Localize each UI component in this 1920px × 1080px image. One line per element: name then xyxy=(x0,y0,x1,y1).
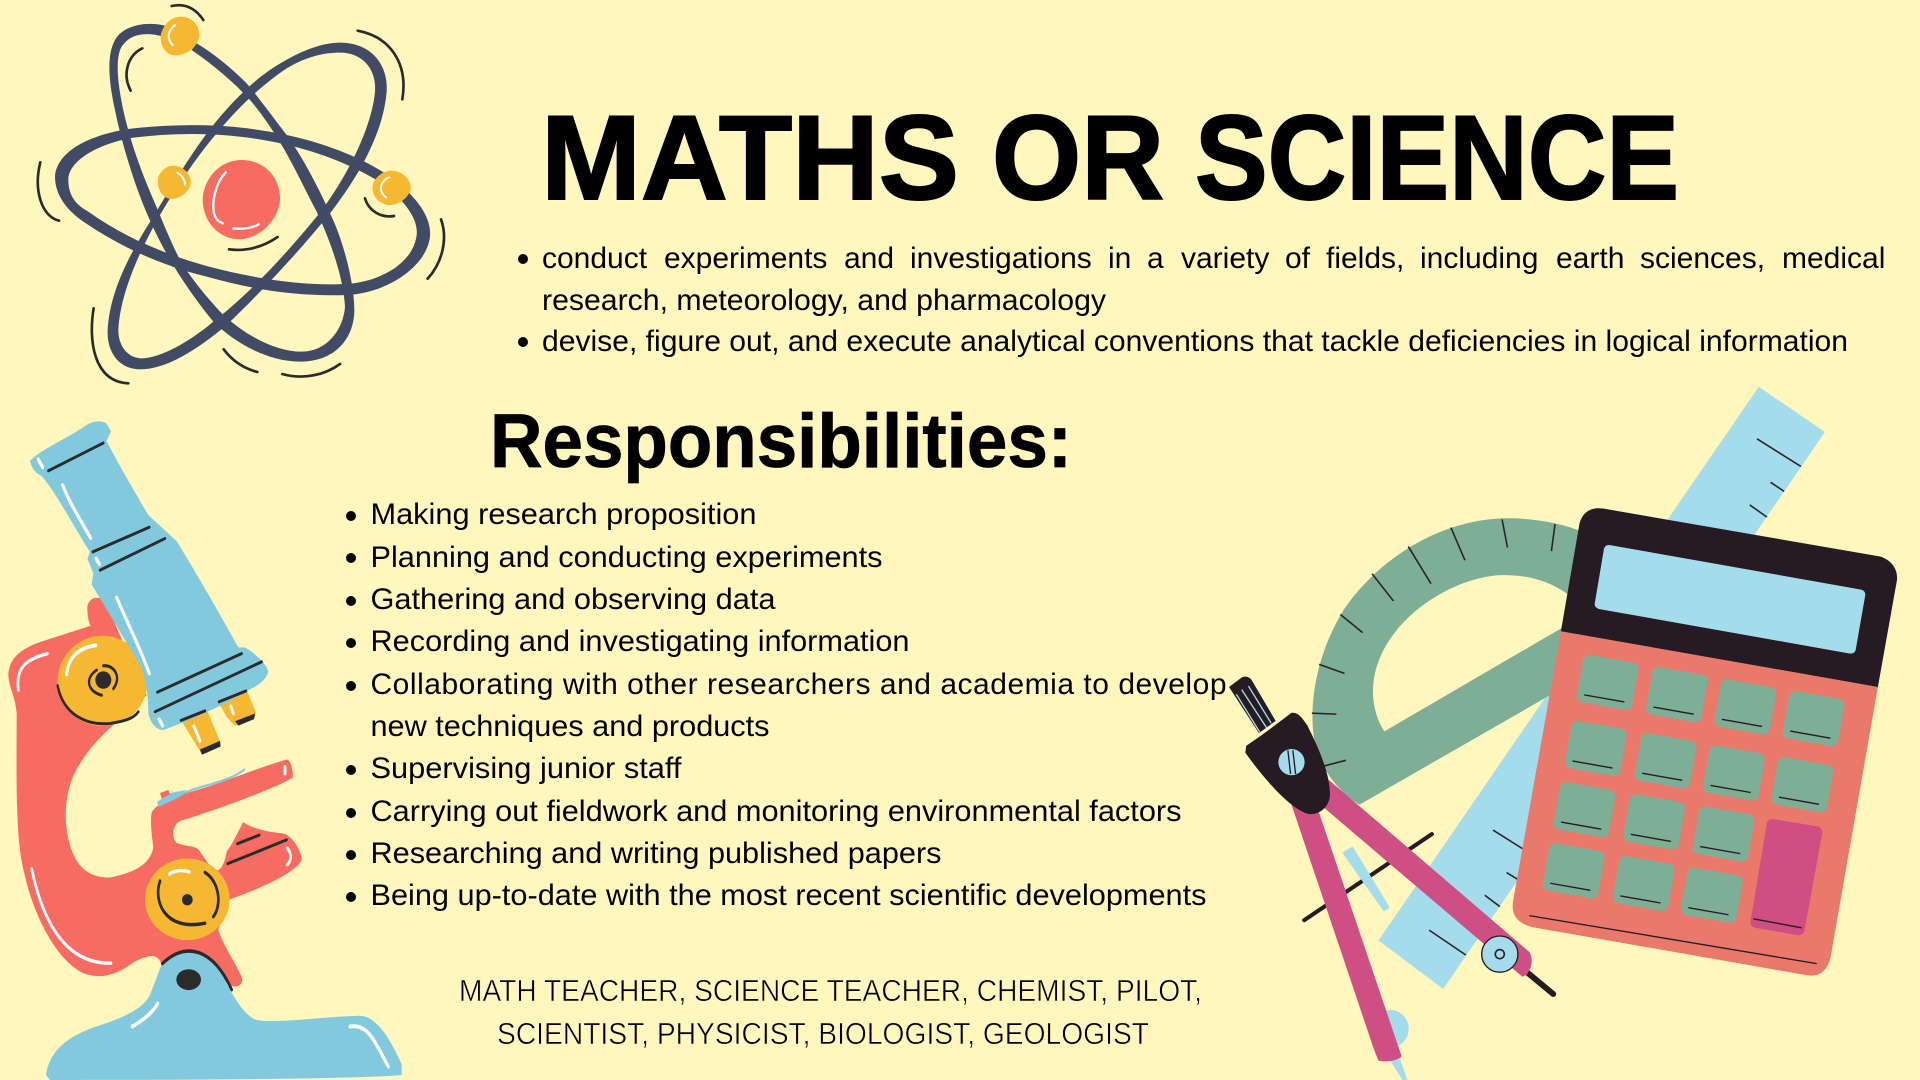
third line: devise, figure out, and execute analytical conventions that tackle deficiencies in logical information xyxy=(542,325,1848,358)
justified first line: conduct xyxy=(542,242,648,275)
lower knob details xyxy=(158,872,218,925)
microscope arm xyxy=(8,598,302,986)
compass legs xyxy=(1292,805,1402,1061)
calculator keys xyxy=(1542,654,1845,924)
justified first line: medical xyxy=(1782,242,1885,275)
equals key xyxy=(1750,819,1822,935)
justified first line: sciences, xyxy=(1640,242,1765,275)
atom electrons xyxy=(158,17,411,205)
glass slide xyxy=(177,769,245,797)
focus knob lower xyxy=(145,859,230,940)
tube bands xyxy=(48,443,287,864)
objective lenses xyxy=(182,690,256,754)
protractor ticks xyxy=(1312,519,1555,766)
justified first line: in xyxy=(1108,242,1131,275)
text block: top bullet points xyxy=(518,242,1885,358)
careers text xyxy=(459,973,1202,1051)
icon: atom xyxy=(38,5,444,383)
ruler xyxy=(1378,387,1825,989)
compass cross line xyxy=(1304,834,1432,920)
justified first line: fields, xyxy=(1326,242,1404,275)
calculator body xyxy=(1513,631,1878,976)
microscope highlights xyxy=(18,459,291,963)
justified first line: experiments xyxy=(664,242,827,275)
atom orbits xyxy=(55,24,430,369)
list item continuation: new techniques and products xyxy=(370,710,770,743)
calculator screen xyxy=(1595,545,1865,654)
calculator xyxy=(1513,508,1897,976)
icon: maths tools xyxy=(1229,387,1897,1080)
list item: Gathering and observing data xyxy=(370,583,776,616)
list item: Being up-to-date with the most recent scientific developments xyxy=(370,879,1206,912)
title xyxy=(541,91,1679,225)
title word: SCIENCE xyxy=(1195,91,1679,225)
heading: responsibilities: Responsibilities: xyxy=(490,399,1072,484)
microscope tube xyxy=(30,421,268,730)
careers line two: SCIENTIST, PHYSICIST, BIOLOGIST, GEOLOGIST xyxy=(497,1016,1149,1051)
compass head xyxy=(1245,713,1330,814)
compass pivot xyxy=(1482,936,1518,972)
compass screw xyxy=(1278,749,1305,775)
justified first line: a xyxy=(1147,242,1164,275)
list item: Carrying out fieldwork and monitoring environmental factors xyxy=(370,795,1182,828)
microscope base xyxy=(46,953,402,1080)
bullet marker xyxy=(518,254,528,264)
list item: Making research proposition xyxy=(370,498,756,531)
electron highlights xyxy=(169,25,389,197)
icon: microscope xyxy=(8,421,402,1080)
motion lines xyxy=(38,5,444,383)
base details xyxy=(162,951,232,990)
justified first line: of xyxy=(1285,242,1311,275)
title word: MATHS xyxy=(541,91,959,225)
justified first line: investigations xyxy=(910,242,1092,275)
calculator top xyxy=(1561,508,1897,687)
compass needle xyxy=(1527,972,1553,994)
list item: Collaborating with other researchers and academia to develop xyxy=(370,668,1226,701)
careers line one: MATH TEACHER, SCIENCE TEACHER, CHEMIST, PILOT, xyxy=(459,973,1202,1008)
title word: OR xyxy=(992,91,1164,225)
compass blue bar xyxy=(1342,846,1390,912)
protractor xyxy=(1312,518,1586,805)
list item: Researching and writing published papers xyxy=(370,837,942,870)
justified first line: variety xyxy=(1181,242,1269,275)
compass foot xyxy=(1371,1010,1409,1048)
ruler ticks xyxy=(1429,439,1801,955)
atom nucleus xyxy=(203,160,280,239)
responsibilities list xyxy=(346,498,1226,912)
list item: Supervising junior staff xyxy=(370,752,682,785)
justified first line: and xyxy=(844,242,894,275)
list item: Planning and conducting experiments xyxy=(370,541,882,574)
compass xyxy=(1229,677,1553,1080)
second line: research, meteorology, and pharmacology xyxy=(542,284,1106,317)
list item: Recording and investigating information xyxy=(370,625,910,658)
upper knob details xyxy=(58,666,138,724)
bullet marker xyxy=(518,337,528,347)
list bullets xyxy=(346,511,356,902)
justified first line: earth xyxy=(1556,242,1624,275)
compass handle xyxy=(1229,677,1276,733)
justified first line: including xyxy=(1420,242,1538,275)
focus knob upper xyxy=(58,636,148,726)
